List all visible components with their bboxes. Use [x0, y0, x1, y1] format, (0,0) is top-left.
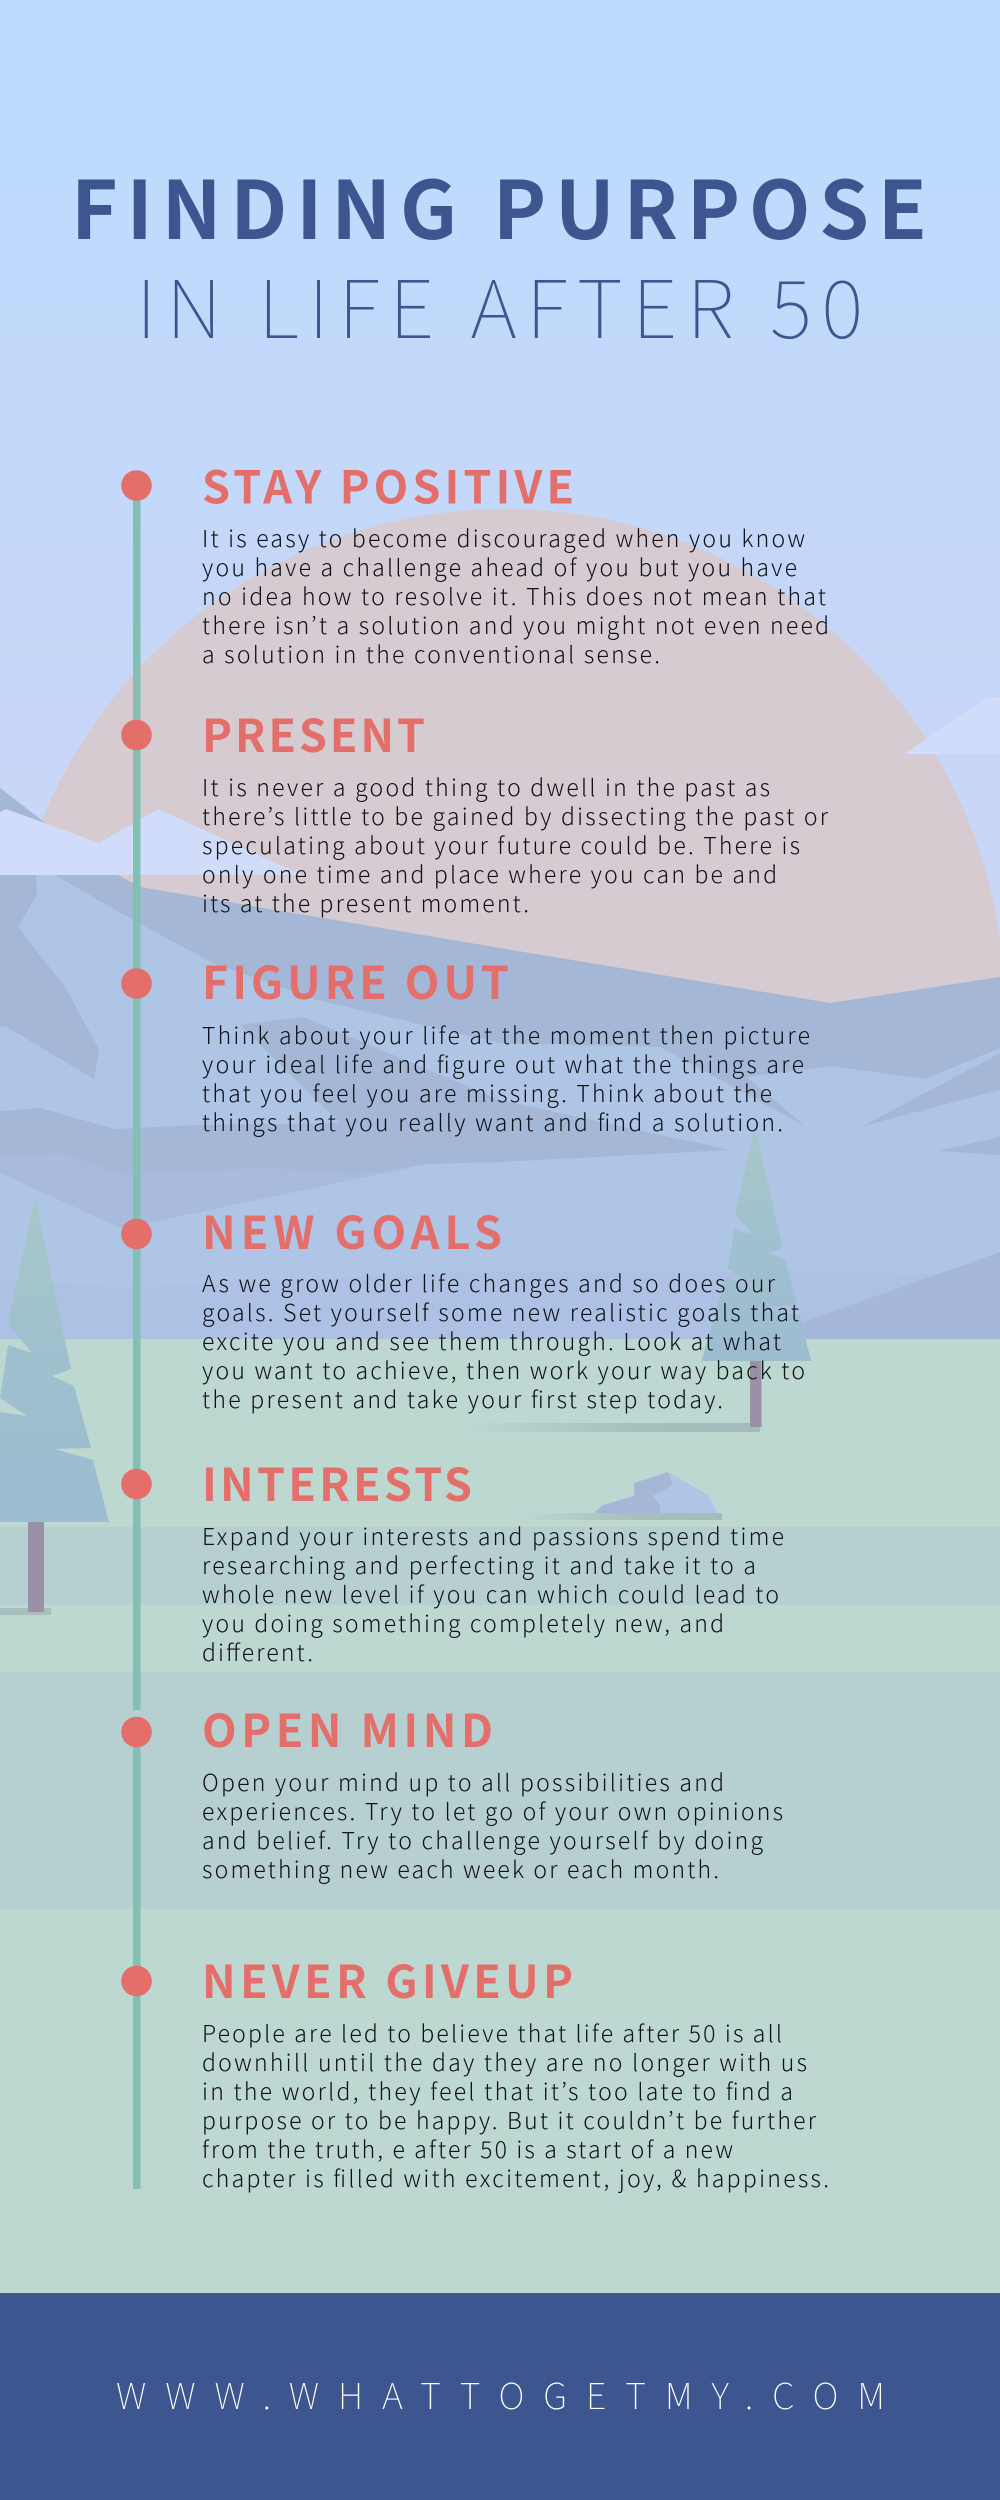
body text: in the world, they feel that it’s too late to find a [202, 2073, 793, 2107]
title line one: FINDING PURPOSE [71, 147, 927, 263]
body text: different. [202, 1634, 313, 1668]
body text: excite you and see them through. Look at what [202, 1323, 781, 1357]
rock [517, 1472, 722, 1520]
step: present [121, 700, 829, 919]
body text [202, 1017, 810, 1138]
body text: People are led to believe that life after 50 is all [202, 2015, 782, 2049]
mountain range [0, 697, 1000, 1340]
bullet [121, 470, 152, 501]
title line two: IN LIFE AFTER 50 [136, 246, 863, 362]
body text: experiences. Try to let go of your own opinions [202, 1793, 783, 1827]
body text: something new each week or each month. [202, 1851, 719, 1885]
bullet [121, 1469, 152, 1499]
bullet [121, 1219, 152, 1249]
timeline line [133, 485, 140, 2189]
body text [202, 769, 829, 919]
heading: PRESENT [202, 700, 425, 765]
step: figure out [121, 947, 810, 1138]
ground [0, 1339, 1000, 2299]
body text: the present and take your first step today. [202, 1381, 723, 1415]
bullet [121, 720, 152, 750]
body text: researching and perfecting it and take it to a [202, 1547, 756, 1581]
body text: goals. Set yourself some new realistic goals that [202, 1294, 799, 1328]
body text [202, 1265, 805, 1415]
footer band [0, 2293, 1000, 2500]
step: stay positive [121, 452, 829, 670]
body text [202, 1518, 784, 1668]
body text: It is never a good thing to dwell in the past as [202, 769, 770, 803]
heading: OPEN MIND [202, 1695, 493, 1760]
body text [202, 2015, 829, 2194]
step: interests [121, 1449, 784, 1668]
body text: chapter is filled with excitement, joy, & happiness. [202, 2160, 829, 2194]
body text [202, 520, 829, 670]
body text: things that you really want and find a solution. [202, 1104, 783, 1138]
body text: speculating about your future could be. There is [202, 827, 800, 861]
sky background [0, 0, 1000, 1340]
body text: a solution in the conventional sense. [202, 636, 660, 670]
body text: purpose or to be happy. But it couldn’t be further [202, 2102, 817, 2136]
right pine tree [460, 1128, 811, 1432]
step: never giveup [121, 1946, 829, 2194]
heading: NEW GOALS [202, 1197, 502, 1262]
body text: no idea how to resolve it. This does not mean that [202, 578, 826, 612]
body text: your ideal life and figure out what the things are [202, 1046, 804, 1080]
body text: you doing something completely new, and [202, 1605, 724, 1639]
body text: you want to achieve, then work your way back to [202, 1352, 805, 1386]
sun [5, 509, 1000, 1509]
bullet [121, 968, 152, 999]
body text [202, 1764, 783, 1885]
website url: WWW.WHATTOGETMY.COM [116, 2368, 885, 2420]
heading: INTERESTS [202, 1449, 472, 1514]
body text: downhill until the day they are no longer with us [202, 2044, 807, 2078]
heading: STAY POSITIVE [202, 452, 574, 516]
body text: whole new level if you can which could lead to [202, 1576, 779, 1610]
left pine tree [0, 1198, 109, 1615]
footer [0, 2293, 1000, 2500]
heading: NEVER GIVEUP [202, 1946, 573, 2011]
body text: there’s little to be gained by dissecting the past or [202, 798, 829, 832]
body text: you have a challenge ahead of you but you have [202, 549, 797, 583]
body text: there isn’t a solution and you might not even need [202, 607, 829, 641]
body text: Open your mind up to all possibilities and [202, 1764, 724, 1798]
body text: It is easy to become discouraged when you know [202, 520, 805, 554]
body text: and belief. Try to challenge yourself by doing [202, 1822, 763, 1856]
body text: from the truth, e after 50 is a start of a new [202, 2131, 733, 2165]
body text: Think about your life at the moment then picture [202, 1017, 810, 1051]
heading: FIGURE OUT [202, 947, 509, 1012]
step: new goals [121, 1197, 805, 1415]
body text: that you feel you are missing. Think about the [202, 1075, 772, 1109]
bullet [121, 1717, 152, 1747]
body text: its at the present moment. [202, 885, 529, 919]
bullet [121, 1966, 152, 1996]
title [71, 147, 927, 362]
body text: As we grow older life changes and so does our [202, 1265, 776, 1299]
body text: only one time and place where you can be and [202, 856, 777, 890]
body text: Expand your interests and passions spend time [202, 1518, 784, 1552]
step: open mind [121, 1695, 783, 1885]
